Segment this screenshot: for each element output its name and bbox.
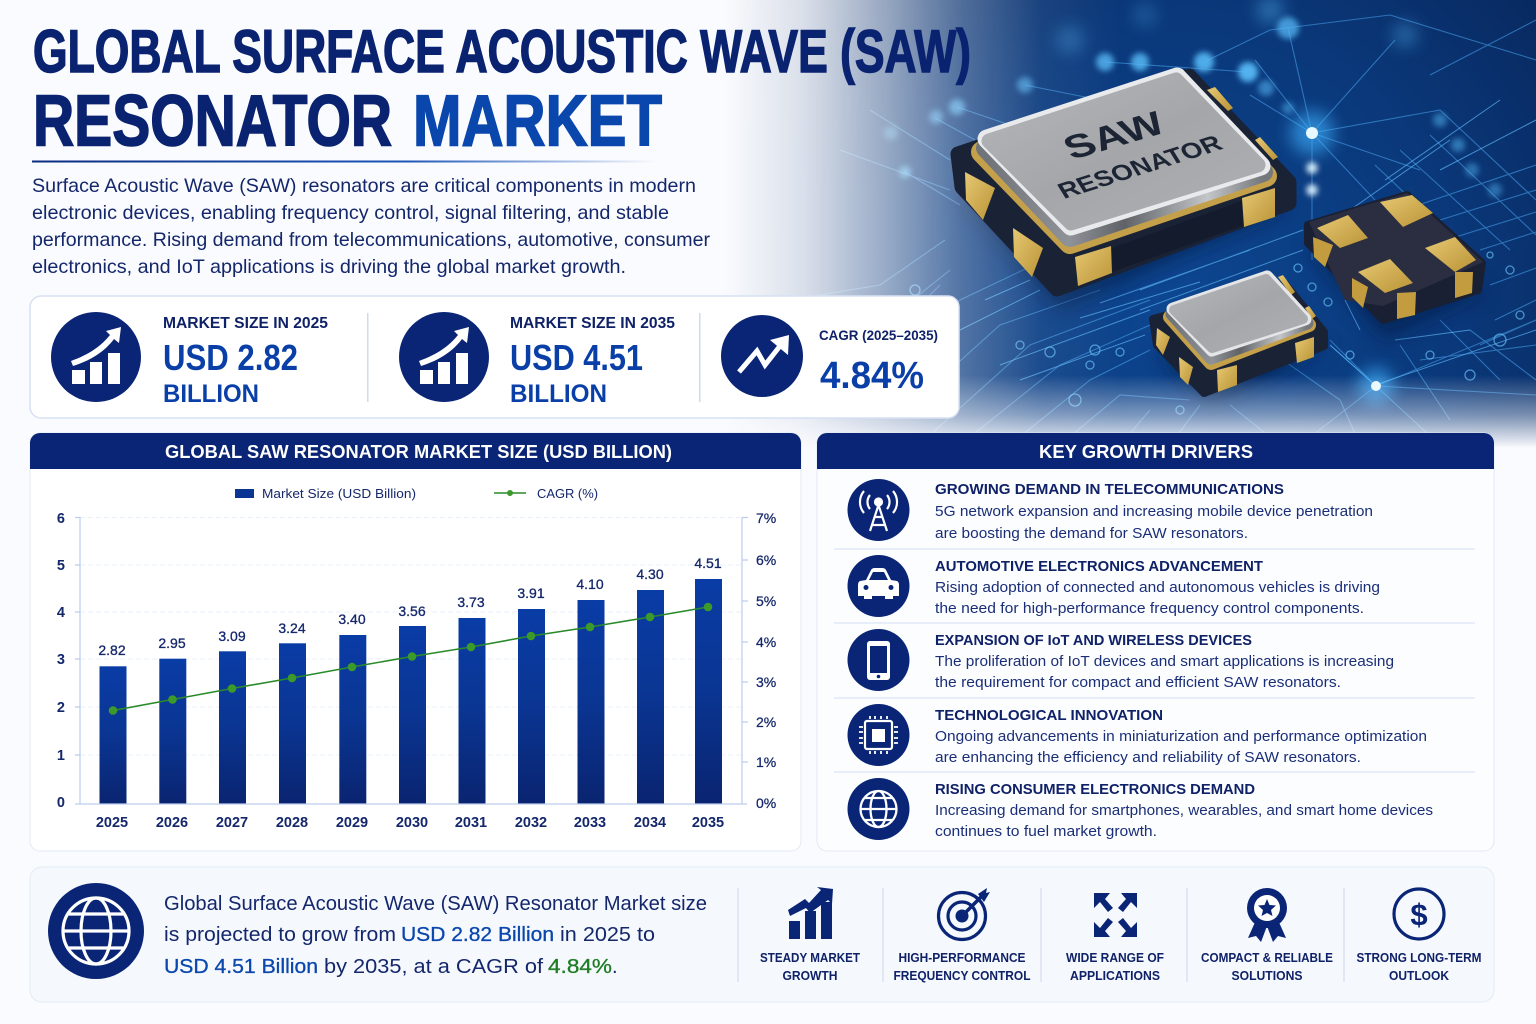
year labels: 2029 bbox=[336, 815, 368, 831]
benefit: strong long-term outlook: $ bbox=[1410, 897, 1428, 932]
title: GLOBAL SURFACE ACOUSTIC WAVE (SAW) bbox=[33, 18, 971, 85]
bars bbox=[100, 579, 722, 804]
benefit: wide range of applications: APPLICATIONS bbox=[1070, 969, 1160, 983]
benefit: steady market growth bbox=[760, 887, 860, 983]
chip label: RESONATOR: RESONATOR bbox=[1053, 130, 1227, 203]
panel: key growth drivers bbox=[817, 433, 1494, 851]
bar value labels: 3.24 bbox=[278, 620, 306, 636]
left axis labels: 0 bbox=[57, 795, 65, 811]
year labels bbox=[96, 815, 724, 831]
driver: IoT and wireless: EXPANSION OF IoT AND WIRELESS DEVICES bbox=[935, 632, 1252, 649]
right axis labels: 4% bbox=[756, 634, 776, 650]
chip shadows bbox=[955, 195, 1487, 410]
left axis labels: 6 bbox=[57, 511, 65, 527]
summary text: is projected to grow from bbox=[164, 924, 396, 946]
bar value labels: 3.91 bbox=[517, 585, 545, 601]
driver: IoT and wireless: The proliferation of IoT devices and smart applications is increasing bbox=[935, 653, 1394, 670]
stat: market size 2035: MARKET SIZE IN 2035 bbox=[510, 315, 675, 332]
year labels: 2032 bbox=[515, 815, 547, 831]
stat: CAGR bbox=[721, 315, 938, 397]
driver: technological innovation: TECHNOLOGICAL INNOVATION bbox=[935, 707, 1163, 724]
benefit: compact and reliable solutions bbox=[1201, 888, 1333, 983]
hero image: circuit board with SAW resonator chips bbox=[700, 0, 1536, 450]
bar value labels: 4.10 bbox=[576, 576, 604, 592]
bar value labels: 2.95 bbox=[158, 635, 186, 651]
intro paragraph bbox=[32, 175, 711, 278]
benefit: steady market growth: GROWTH bbox=[782, 969, 838, 983]
left axis labels: 3 bbox=[57, 652, 65, 668]
panel: key statistics bbox=[30, 296, 959, 418]
benefit: high-performance frequency control bbox=[894, 888, 1031, 983]
stat: CAGR: CAGR (2025–2035) bbox=[819, 327, 938, 343]
stat: market size 2025: BILLION bbox=[163, 380, 259, 408]
right axis labels: 1% bbox=[756, 754, 776, 770]
stat: market size 2035 bbox=[399, 312, 675, 408]
year labels: 2025 bbox=[96, 815, 128, 831]
gold pads bbox=[965, 87, 1278, 286]
circuit pads bbox=[908, 252, 1524, 414]
title: RESONATOR bbox=[33, 82, 392, 162]
left axis labels: 2 bbox=[57, 700, 65, 716]
stat: market size 2035: BILLION bbox=[510, 380, 607, 408]
stat: CAGR: 4.84% bbox=[820, 355, 924, 397]
driver: automotive: the need for high-performance frequency control components. bbox=[935, 600, 1364, 617]
right axis labels: 5% bbox=[756, 593, 776, 609]
benefit: strong long-term outlook bbox=[1356, 889, 1482, 983]
benefit: compact and reliable solutions: COMPACT & RELIABLE bbox=[1201, 951, 1333, 965]
intro paragraph: performance. Rising demand from telecommunications, automotive, consumer bbox=[32, 229, 711, 251]
chart legend: Market Size (USD Billion) bbox=[262, 486, 416, 501]
driver: consumer electronics: RISING CONSUMER ELECTRONICS DEMAND bbox=[935, 781, 1255, 798]
bar value labels: 2.82 bbox=[98, 642, 126, 658]
driver: technological innovation: Ongoing advancements in miniaturization and performance optimization bbox=[935, 728, 1427, 745]
intro paragraph: Surface Acoustic Wave (SAW) resonators are critical components in modern bbox=[32, 175, 696, 197]
chip: small resonator bbox=[1153, 275, 1324, 393]
year labels: 2033 bbox=[574, 815, 606, 831]
year labels: 2026 bbox=[156, 815, 188, 831]
driver: telecommunications: 5G network expansion and increasing mobile device penetration bbox=[935, 503, 1373, 520]
driver: automotive: Rising adoption of connected and autonomous vehicles is driving bbox=[935, 579, 1380, 596]
stat: market size 2025: USD 2.82 bbox=[163, 337, 298, 378]
stat: market size 2025: MARKET SIZE IN 2025 bbox=[163, 315, 328, 332]
driver: consumer electronics bbox=[848, 778, 1433, 840]
benefit: compact and reliable solutions: SOLUTIONS bbox=[1232, 969, 1302, 983]
driver: automotive: AUTOMOTIVE ELECTRONICS ADVANCEMENT bbox=[935, 558, 1263, 575]
left axis labels: 5 bbox=[57, 558, 65, 574]
stat: market size 2035: USD 4.51 bbox=[510, 337, 643, 378]
benefit: wide range of applications: WIDE RANGE OF bbox=[1066, 951, 1164, 965]
summary text bbox=[164, 893, 707, 978]
bar value labels: 4.30 bbox=[636, 566, 664, 582]
year labels: 2028 bbox=[276, 815, 308, 831]
chart legend: CAGR (%) bbox=[537, 486, 598, 501]
panel: summary footer bbox=[30, 867, 1494, 1002]
bar value labels bbox=[98, 555, 722, 658]
CAGR line bbox=[109, 603, 712, 715]
driver: IoT and wireless: the requirement for compact and efficient SAW resonators. bbox=[935, 674, 1341, 691]
panel: market size chart bbox=[30, 433, 801, 851]
benefit: strong long-term outlook: OUTLOOK bbox=[1389, 969, 1449, 983]
icon: globe bbox=[48, 883, 144, 979]
bright node highlights bbox=[1290, 111, 1394, 404]
chip: bottom view with four gold pads bbox=[1308, 193, 1483, 320]
bar value labels: 4.51 bbox=[694, 555, 722, 571]
circuit traces bbox=[790, 15, 1536, 445]
axes bbox=[75, 518, 748, 804]
summary text: by 2035, at a CAGR of bbox=[324, 956, 543, 978]
package body bbox=[958, 76, 1289, 289]
driver: telecommunications: GROWING DEMAND IN TELECOMMUNICATIONS bbox=[935, 481, 1284, 498]
benefit: wide range of applications bbox=[1066, 893, 1164, 983]
title bbox=[33, 18, 971, 162]
year labels: 2031 bbox=[455, 815, 487, 831]
chart legend bbox=[235, 486, 598, 501]
benefit: steady market growth: STEADY MARKET bbox=[760, 951, 860, 965]
driver: technological innovation bbox=[848, 704, 1427, 766]
bar value labels: 3.56 bbox=[398, 603, 426, 619]
driver: automotive bbox=[848, 555, 1380, 617]
right axis labels: 0% bbox=[756, 795, 776, 811]
summary text: USD 2.82 Billion bbox=[401, 924, 554, 946]
driver: IoT and wireless bbox=[848, 629, 1394, 691]
driver: consumer electronics: continues to fuel market growth. bbox=[935, 823, 1157, 840]
chip: large SAW resonator bbox=[958, 76, 1289, 289]
summary text: in 2025 to bbox=[560, 924, 655, 946]
title: MARKET bbox=[413, 82, 662, 162]
bar value labels: 3.09 bbox=[218, 628, 246, 644]
intro paragraph: electronic devices, enabling frequency control, signal filtering, and stable bbox=[32, 202, 669, 224]
glowing bokeh nodes bbox=[884, 0, 1502, 197]
summary text: USD 4.51 Billion bbox=[164, 956, 318, 978]
stat: market size 2025 bbox=[51, 312, 328, 408]
driver: technological innovation: are enhancing the efficiency and reliability of SAW resonators. bbox=[935, 749, 1361, 766]
right axis labels: 7% bbox=[756, 510, 776, 526]
left axis labels: 1 bbox=[57, 748, 65, 764]
drivers heading: KEY GROWTH DRIVERS bbox=[1039, 442, 1253, 462]
year labels: 2034 bbox=[634, 815, 666, 831]
left axis labels: 4 bbox=[57, 605, 65, 621]
summary text: 4.84% bbox=[548, 956, 612, 978]
year labels: 2030 bbox=[396, 815, 428, 831]
grid lines bbox=[80, 518, 742, 755]
driver: telecommunications bbox=[848, 479, 1373, 542]
summary text: . bbox=[612, 956, 618, 978]
benefit: strong long-term outlook: STRONG LONG-TERM bbox=[1356, 951, 1482, 965]
fine parallel traces bbox=[960, 100, 1536, 385]
intro paragraph: electronics, and IoT applications is driving the global market growth. bbox=[32, 256, 626, 278]
right axis labels: 3% bbox=[756, 674, 776, 690]
driver: consumer electronics: Increasing demand for smartphones, wearables, and smart home devices bbox=[935, 802, 1433, 819]
right axis labels: 2% bbox=[756, 714, 776, 730]
summary text: Global Surface Acoustic Wave (SAW) Resonator Market size bbox=[164, 893, 707, 915]
driver: telecommunications: are boosting the demand for SAW resonators. bbox=[935, 525, 1248, 542]
benefit: high-performance frequency control: FREQUENCY CONTROL bbox=[894, 969, 1031, 983]
year labels: 2035 bbox=[692, 815, 724, 831]
year labels: 2027 bbox=[216, 815, 248, 831]
right axis labels bbox=[756, 510, 776, 811]
chart heading: GLOBAL SAW RESONATOR MARKET SIZE (USD BILLION) bbox=[165, 442, 672, 462]
bar value labels: 3.73 bbox=[457, 594, 485, 610]
left axis labels bbox=[57, 511, 65, 811]
benefit: high-performance frequency control: HIGH-PERFORMANCE bbox=[898, 951, 1026, 965]
bar value labels: 3.40 bbox=[338, 611, 366, 627]
right axis labels: 6% bbox=[756, 552, 776, 568]
chip label: SAW: SAW bbox=[1057, 105, 1173, 167]
